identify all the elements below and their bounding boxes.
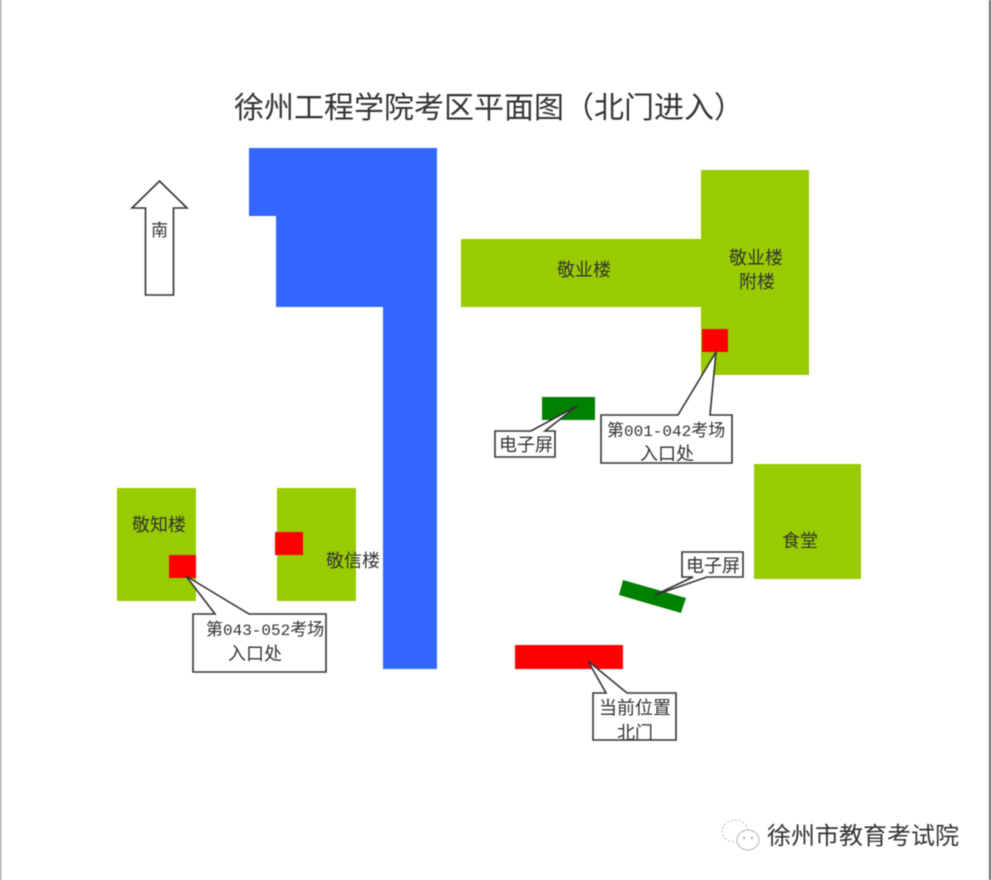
callout: 电子屏 north [495,406,577,457]
screen: east [619,580,686,613]
callout: 当前位置 北门: 北门 [617,723,653,743]
watermark: 徐州市教育考试院 [767,823,959,850]
building: 敬业楼附楼: 敬业楼 [729,248,783,268]
callout: 第001-042考场入口处 [601,352,732,464]
entrance marker: 001-042 [702,329,728,352]
callout: 电子屏 east [655,552,743,595]
callout: 第001-042考场入口处: 入口处 [640,444,694,464]
building: 食堂: 食堂 [782,531,818,551]
current position: north gate [515,645,623,669]
callout: 电子屏 east: 电子屏 [686,556,740,576]
building: 食堂 [754,464,861,579]
callout: 当前位置 北门 [588,661,676,743]
callout: 第043-052考场入口处 [186,576,326,672]
river [249,148,437,669]
arrow: south [132,181,187,295]
entrance marker: 敬信楼 [275,532,303,555]
icon: wechat [722,820,759,850]
entrance marker: 043-052 [169,555,196,578]
building: 敬知楼: 敬知楼 [132,515,186,535]
building: 敬业楼: 敬业楼 [557,260,611,280]
callout: 第001-042考场入口处: 第001-042考场 [607,421,725,441]
callout: 第043-052考场入口处: 入口处 [228,644,282,664]
building: 敬信楼 [277,488,380,601]
callout: 电子屏 north: 电子屏 [499,435,553,455]
building: 敬业楼附楼 [701,170,809,375]
building: 敬信楼: 敬信楼 [326,551,380,571]
callout: 当前位置 北门: 当前位置 [599,698,671,718]
title: 徐州工程学院考区平面图（北门进入） [234,92,744,125]
arrow: south: 南 [151,221,168,240]
building: 敬业楼附楼: 附楼 [739,272,775,292]
building: 敬业楼 [461,239,702,307]
building: 敬知楼 [117,488,196,601]
callout: 第043-052考场入口处: 第043-052考场 [206,620,324,640]
screen: north [542,397,595,420]
